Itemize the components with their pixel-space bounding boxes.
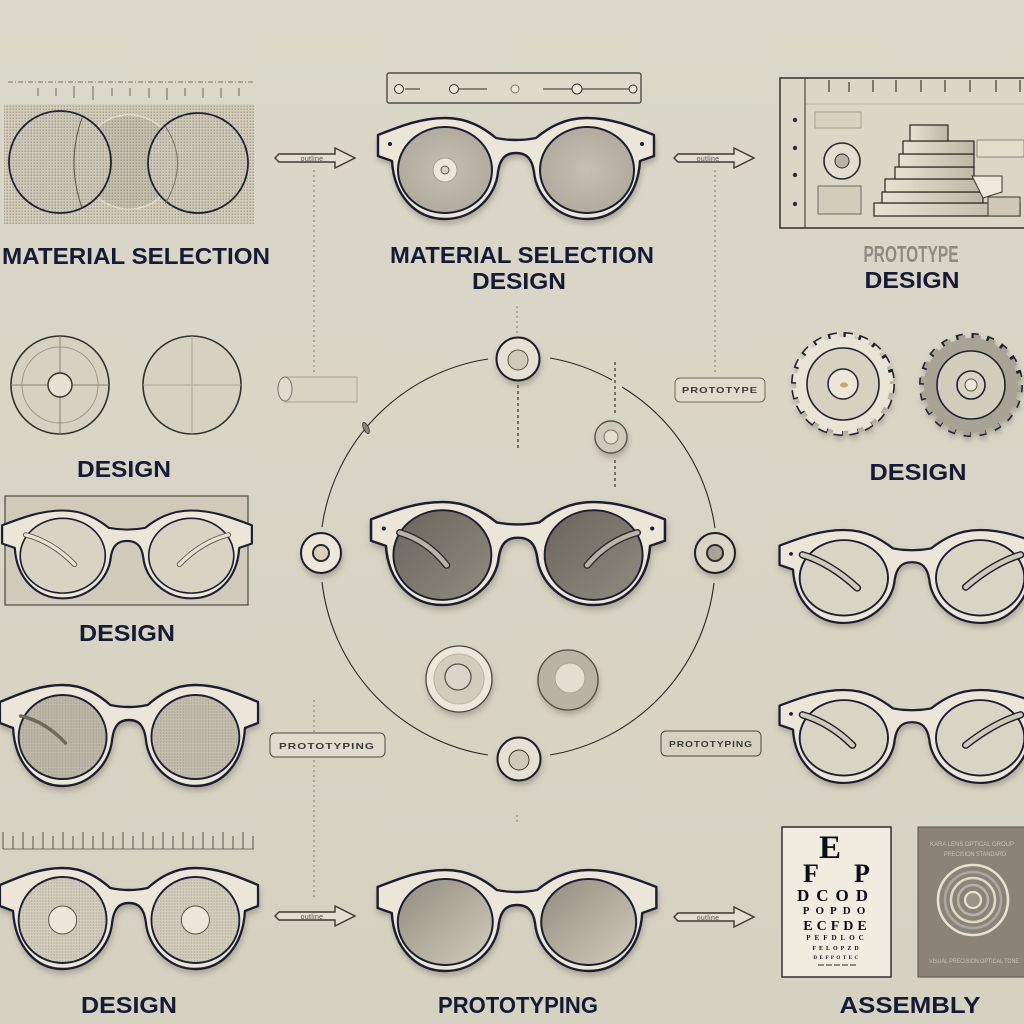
arrow: bottom left: outline — [301, 914, 323, 921]
panel: eye chart: ECFDE — [803, 919, 871, 934]
panel: concentric lens card — [918, 827, 1024, 977]
icon: small marker on circle — [361, 422, 371, 434]
label: prototype pill upper — [675, 378, 765, 402]
glasses: bottom centre — [378, 870, 656, 971]
panel: eye chart: PEFDLOC — [806, 934, 868, 942]
glasses: top centre — [378, 118, 654, 219]
node: bottom — [498, 738, 540, 780]
icon: two discs left — [11, 336, 241, 434]
heading: design top: DESIGN — [472, 268, 566, 294]
inner dashed connectors — [518, 362, 615, 490]
arrow: top right: outline — [697, 156, 719, 163]
arrow: top right — [674, 148, 754, 168]
label: prototype pill lower right — [661, 731, 761, 756]
arrow: bottom right — [674, 907, 754, 927]
glasses: bottom left — [0, 868, 258, 969]
node: lower-left disc — [426, 646, 492, 712]
heading: material selection design: MATERIAL SELECTION — [390, 242, 654, 268]
icon: gears right — [794, 335, 1020, 434]
panel: eye chart: DCOD — [797, 886, 875, 905]
panel: eye chart: FELOPZD — [812, 946, 862, 952]
label: prototype pill lower left: PROTOTYPING — [279, 741, 375, 751]
ruler: bottom left — [3, 832, 254, 849]
arrow: top left — [275, 148, 355, 168]
heading: design left 1: DESIGN — [77, 456, 171, 482]
heading: design top right: DESIGN — [864, 267, 960, 293]
node: right — [695, 533, 735, 573]
glasses: central dark — [371, 502, 665, 605]
panel: concentric lens card: KARA LENS OPTICAL GROUP — [930, 842, 1014, 848]
heading: assembly: ASSEMBLY — [840, 992, 980, 1018]
panel: blueprint steps — [780, 78, 1024, 228]
label: prototype pill lower right: PROTOTYPING — [669, 739, 753, 749]
heading: prototyping: PROTOTYPING — [438, 992, 598, 1018]
panel: eye chart: E — [819, 830, 841, 866]
panel: eye chart: P — [854, 859, 870, 888]
arrow: bottom left — [275, 906, 355, 926]
heading: material selection: MATERIAL SELECTION — [2, 243, 270, 269]
heading: design right 1: DESIGN — [870, 459, 966, 485]
glasses: right row 1 — [780, 530, 1024, 623]
panel: concentric lens card: PRECISION STANDARD — [944, 852, 1007, 858]
arrow: bottom right: outline — [697, 915, 719, 922]
panel: slider bar — [387, 73, 641, 103]
arrow: top left: outline — [301, 156, 323, 163]
node: lower-right disc — [538, 650, 598, 710]
panel: glasses in frame left — [2, 496, 252, 605]
panel: material swatch — [4, 82, 254, 224]
heading: design bottom: DESIGN — [81, 992, 177, 1018]
icon: small cylinder — [278, 377, 357, 402]
heading: design left 2: DESIGN — [79, 620, 175, 646]
vertical dashed connectors — [314, 170, 715, 898]
panel: eye chart: F — [803, 859, 819, 888]
node: upper inner — [595, 421, 627, 453]
glasses: right row 2 — [780, 690, 1024, 783]
panel: eye chart: POPDO — [803, 905, 871, 917]
label: prototype pill lower left — [270, 733, 385, 757]
central cycle circle — [322, 358, 715, 755]
label: prototype pill upper: PROTOTYPE — [682, 385, 758, 395]
panel: eye chart: DEFPOTEC — [813, 956, 861, 961]
panel: eye chart — [782, 827, 891, 977]
node: left — [301, 533, 341, 573]
heading: prototype faded: PROTOTYPE — [864, 241, 958, 267]
node: top — [496, 338, 540, 380]
glasses: left row 2 — [0, 685, 258, 786]
